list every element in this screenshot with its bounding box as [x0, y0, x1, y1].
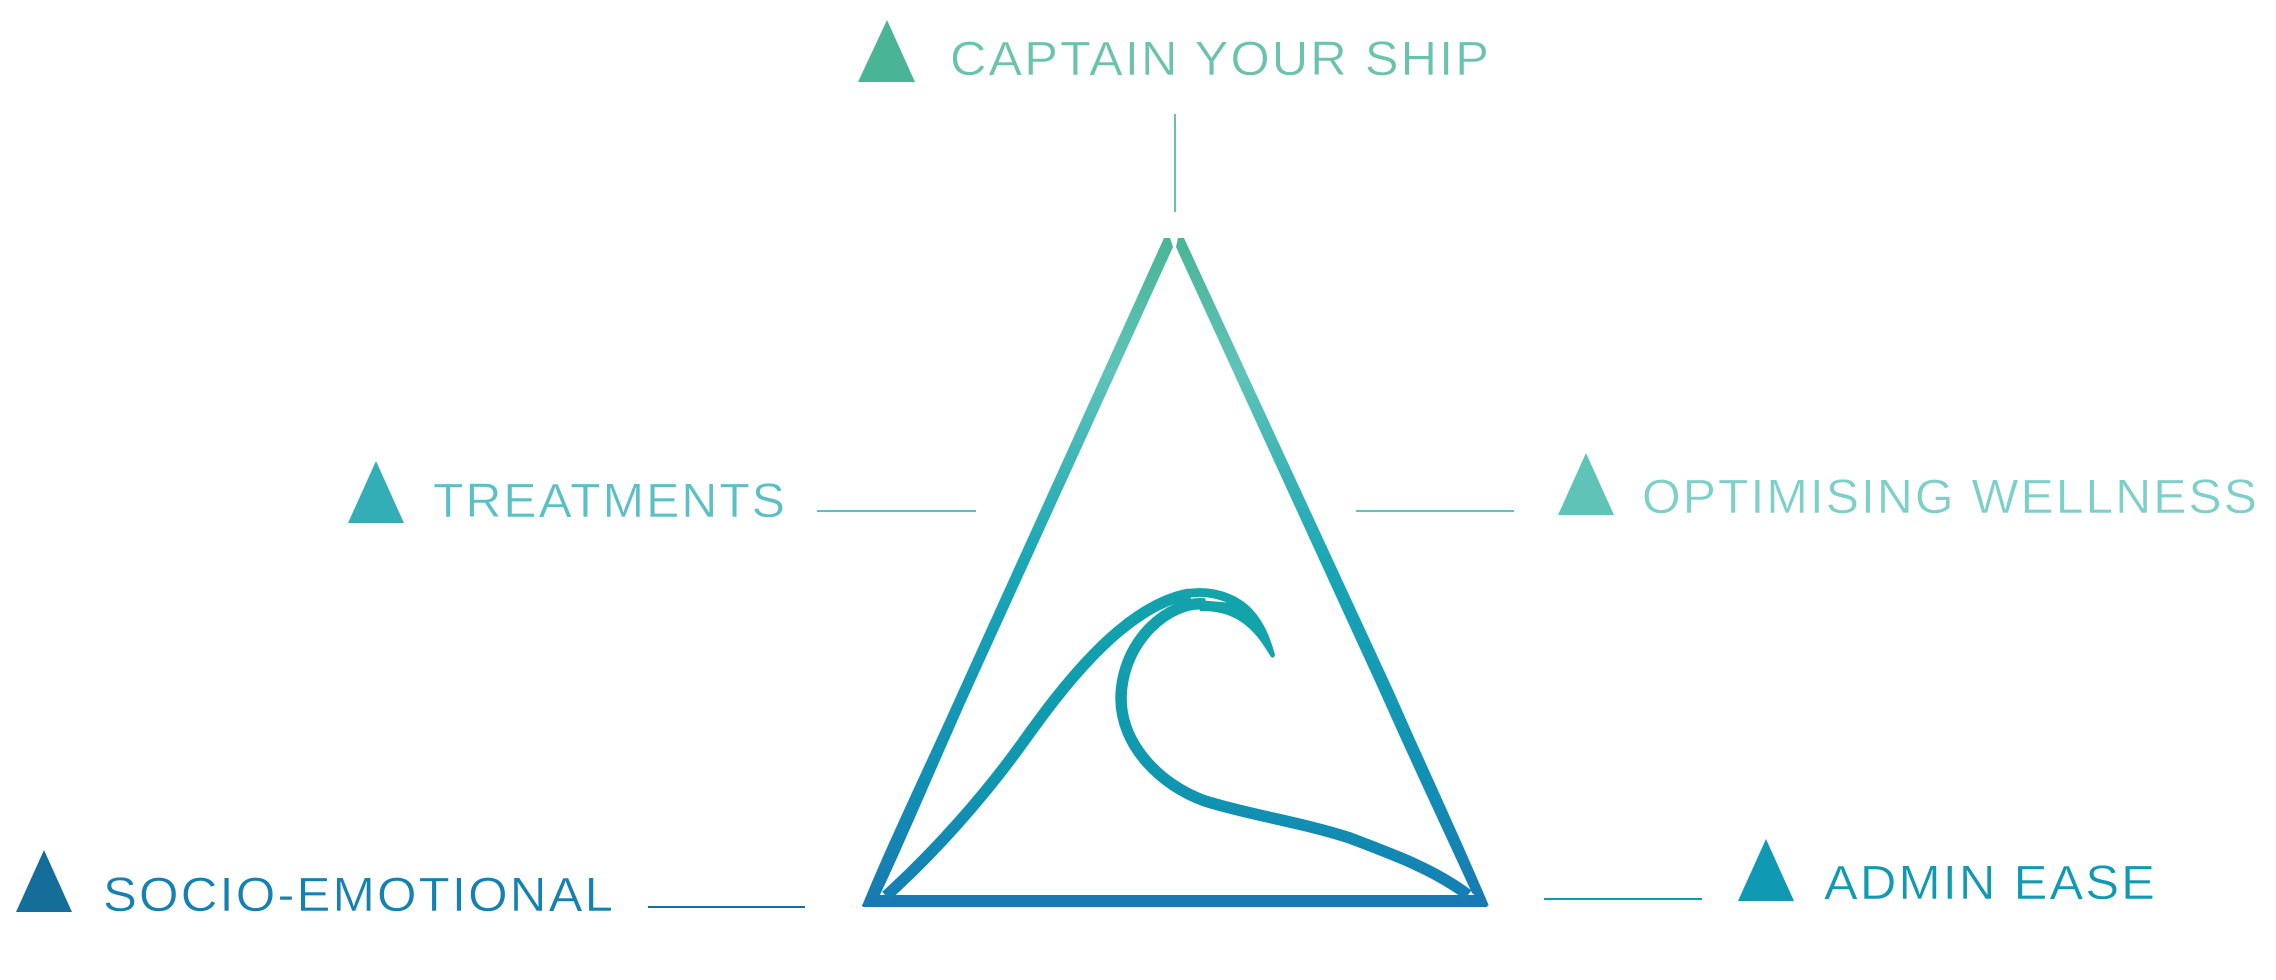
icon: captain triangle [858, 20, 915, 82]
heading: optimising wellness: OPTIMISING WELLNESS [1642, 471, 2259, 524]
heading: treatments: TREATMENTS [433, 475, 787, 528]
icon: treatments triangle [348, 461, 404, 523]
connector: admin ease [1544, 898, 1702, 900]
triangle left side [862, 238, 1173, 906]
icon: admin ease triangle [1738, 839, 1794, 901]
triangle base [862, 895, 1488, 907]
connector: captain your ship [1174, 114, 1176, 212]
wave [886, 588, 1468, 896]
wave curl strand [1121, 604, 1468, 895]
panel: admin ease [1738, 839, 2157, 910]
wave crest [1183, 588, 1275, 658]
icon: optimising wellness triangle [1558, 453, 1614, 515]
wave back strand [886, 594, 1190, 896]
heading: socio-emotional: SOCIO-EMOTIONAL [103, 869, 615, 922]
panel: optimising wellness [1558, 453, 2259, 524]
triangle right side [1176, 238, 1489, 906]
panel: treatments [348, 461, 787, 528]
connector: optimising wellness [1356, 510, 1514, 512]
connector: socio-emotional [648, 906, 805, 908]
icon: socio-emotional triangle [16, 850, 72, 912]
connector: treatments [817, 510, 976, 512]
panel: captain your ship [858, 20, 1491, 86]
logo: triangle with wave [862, 238, 1489, 907]
panel: socio-emotional [16, 850, 615, 922]
heading: admin ease: ADMIN EASE [1824, 857, 2157, 910]
heading: captain your ship: CAPTAIN YOUR SHIP [950, 33, 1491, 86]
